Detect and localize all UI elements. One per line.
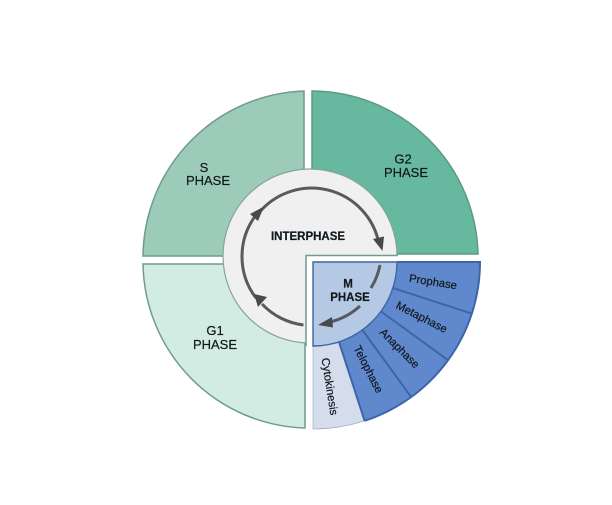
outline of M phase corner — [306, 256, 398, 346]
arrow: interphase cycle — [242, 188, 384, 325]
panel: G1 phase: PHASE — [193, 337, 237, 352]
panel: M phase ring — [313, 262, 480, 429]
stage: Anaphase — [362, 311, 448, 397]
panel: G1 phase: G1 — [206, 323, 224, 338]
panel: G2 phase: PHASE — [384, 165, 428, 180]
stage: Anaphase: Anaphase — [377, 327, 421, 371]
stage: Prophase: Prophase — [408, 273, 458, 292]
ring dividers and outer edge — [339, 262, 480, 421]
panel: S phase: S — [200, 160, 209, 175]
panel: G2 phase — [312, 91, 478, 254]
stage: Cytokinesis — [313, 342, 365, 429]
M phase centre: M — [343, 278, 353, 290]
stage: Prophase — [393, 262, 480, 314]
white corner behind M phase — [306, 256, 398, 350]
stage: Telophase: Telophase — [351, 344, 385, 395]
panel: S phase: PHASE — [186, 173, 230, 188]
arrow: M phase cycle — [318, 265, 380, 328]
M phase centre — [313, 262, 397, 346]
stage: Metaphase: Metaphase — [394, 300, 449, 336]
stage: Metaphase — [381, 288, 472, 360]
stage: Telophase — [339, 330, 411, 421]
panel: S phase — [143, 91, 304, 256]
panel: G1 phase — [143, 264, 305, 428]
panel: interphase centre — [223, 169, 397, 343]
panel: interphase centre: INTERPHASE — [271, 231, 345, 243]
M phase centre: PHASE — [330, 292, 370, 304]
stage: Cytokinesis: Cytokinesis — [319, 357, 339, 416]
panel: G2 phase: G2 — [394, 152, 412, 166]
